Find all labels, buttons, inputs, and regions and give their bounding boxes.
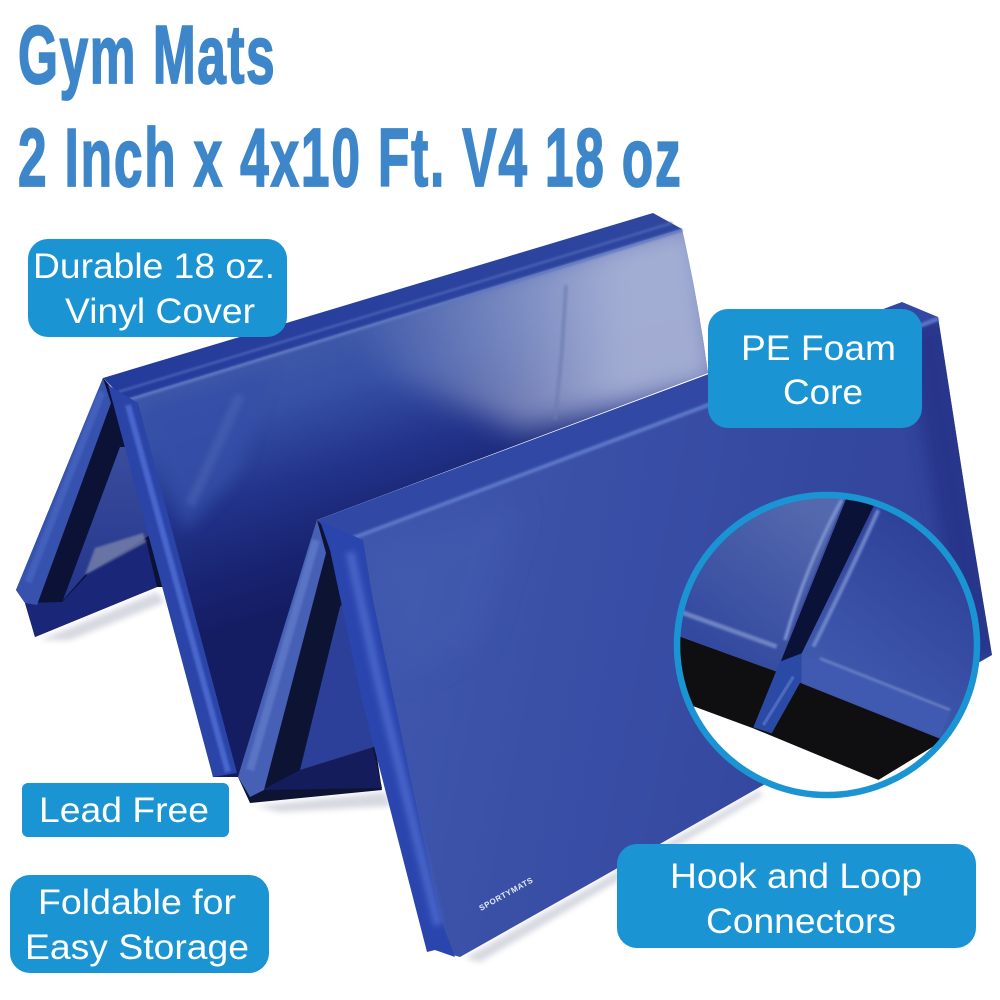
callout: PE foam core xyxy=(708,309,922,428)
crease xyxy=(555,285,566,420)
back flap highlight xyxy=(125,230,682,401)
callout: vinyl cover: Durable 18 oz. xyxy=(33,247,275,286)
panel underlay xyxy=(680,499,940,739)
outer flap xyxy=(16,378,111,605)
lower band highlight xyxy=(820,658,950,710)
interior xyxy=(300,600,380,770)
bright reflection xyxy=(372,229,708,444)
back ridge highlight xyxy=(128,405,228,772)
callout: foldable: Foldable for xyxy=(38,883,236,922)
white floor xyxy=(694,706,878,780)
flap highlight xyxy=(250,540,316,770)
callout: PE foam core: Core xyxy=(783,373,863,412)
callout: hook and loop: Connectors xyxy=(706,902,896,941)
fold underlay xyxy=(16,378,170,637)
inset circle: hook and loop detail xyxy=(674,492,980,798)
lower panel xyxy=(25,540,157,637)
left panel edge highlight xyxy=(680,612,777,647)
callout: foldable xyxy=(10,875,269,973)
flap highlight xyxy=(28,392,102,582)
back flap seam xyxy=(118,223,672,392)
callout: hook and loop: Hook and Loop xyxy=(670,857,922,896)
callout: lead free: Lead Free xyxy=(39,791,209,830)
left panel glow xyxy=(167,440,242,526)
gym mat photo xyxy=(16,213,1000,962)
dark seam xyxy=(780,493,875,663)
left top glow xyxy=(370,500,520,680)
title xyxy=(18,7,681,204)
callout: hook and loop xyxy=(617,844,976,948)
front panel shading xyxy=(370,315,1000,680)
interior xyxy=(63,447,150,600)
front mat main panel xyxy=(340,317,992,957)
logo on mat: SPORTYMATS xyxy=(478,875,535,913)
callout: vinyl cover xyxy=(28,239,287,337)
callout: vinyl cover: Vinyl Cover xyxy=(65,292,255,331)
interior velcro patch xyxy=(85,533,146,575)
circle background xyxy=(677,495,977,795)
right seam highlight xyxy=(813,510,878,647)
callout: lead free xyxy=(22,783,229,837)
callout: foldable: Easy Storage xyxy=(25,928,249,967)
front mat top flap xyxy=(317,302,938,543)
right edge shade xyxy=(919,317,992,662)
back mat ridge strip xyxy=(108,385,237,777)
fold underlay xyxy=(238,520,382,803)
connector strap xyxy=(753,653,802,733)
front flap highlight xyxy=(345,319,938,541)
ground shadows xyxy=(40,592,762,962)
front mat ridge strip xyxy=(320,521,455,957)
callout: PE foam core: PE Foam xyxy=(741,329,896,368)
back mat main panel xyxy=(125,229,708,777)
black velcro strip xyxy=(673,630,947,780)
title line 1: Gym Mats xyxy=(18,7,275,101)
right panel lower band xyxy=(802,657,950,737)
title line 2: 2 Inch x 4x10 Ft. V4 18 oz xyxy=(18,110,681,204)
front fold xyxy=(238,520,382,803)
back panel sheen xyxy=(138,215,725,530)
back mat top flap xyxy=(103,213,682,400)
circle ring xyxy=(677,495,977,795)
lower panel blur xyxy=(262,745,382,790)
flap xyxy=(238,520,326,797)
strap highlight xyxy=(763,677,793,725)
streak xyxy=(190,395,240,505)
left fold xyxy=(16,378,170,637)
left seam highlight xyxy=(785,500,842,640)
front ridge highlight xyxy=(350,552,438,925)
left panel xyxy=(680,498,844,672)
right panel xyxy=(802,506,972,739)
